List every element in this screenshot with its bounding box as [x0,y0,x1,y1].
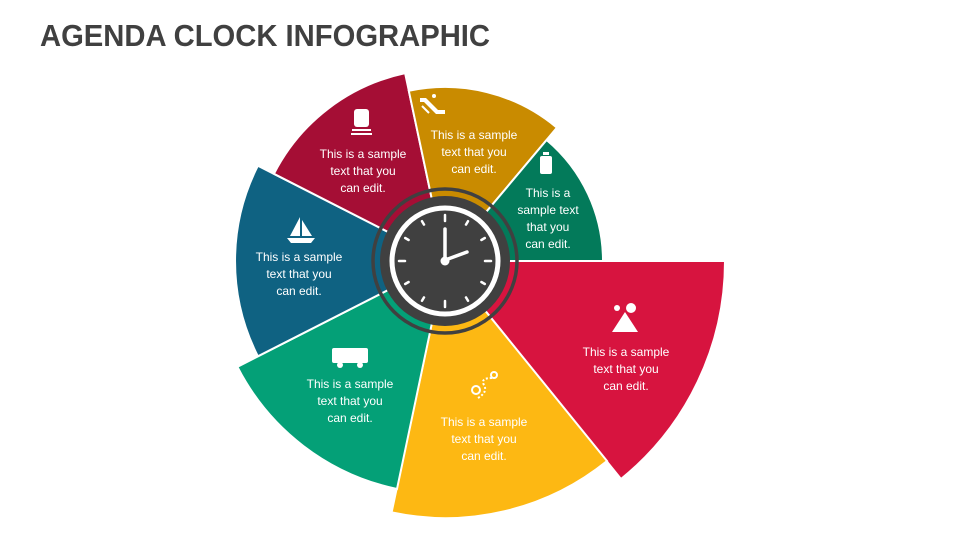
clock [373,189,517,333]
panel: green slice [237,261,445,489]
text: gold: text that you [441,145,507,159]
text: blue: This is a sample [256,250,343,264]
text: teal: can edit. [525,237,571,251]
title: AGENDA CLOCK INFOGRAPHIC [40,18,490,53]
icon: escalator [420,94,445,114]
text: blue: can edit. [276,284,322,298]
text: red: text that you [593,362,659,376]
panel: yellow slice [392,261,607,518]
text: yellow: text that you [451,432,517,446]
panel: red slice [445,261,725,479]
text: dark red: This is a sample [320,147,407,161]
text: green: can edit. [327,411,373,425]
panel: teal slice [445,140,603,261]
icon: sailboat [287,217,315,243]
panel: gold slice [409,87,557,261]
text: green: text that you [317,394,383,408]
icon: mountain balloon [612,303,638,332]
panel: blue slice [235,166,445,356]
text: red: can edit. [603,379,649,393]
text: teal: that you [527,220,569,234]
icon: route [472,372,497,398]
icon: luggage [540,152,552,174]
text: yellow: can edit. [461,449,507,463]
text: teal: sample text [517,203,579,217]
text: dark red: text that you [330,164,396,178]
text: gold: can edit. [451,162,497,176]
text: dark red: can edit. [340,181,386,195]
text: red: This is a sample [583,345,670,359]
panel: dark red slice [274,73,445,261]
icon: train [351,109,372,135]
text: blue: text that you [266,267,332,281]
text: green: This is a sample [307,377,394,391]
text: teal: This is a [526,186,571,200]
text: yellow: This is a sample [441,415,528,429]
text: gold: This is a sample [431,128,518,142]
icon: camper van [332,348,368,368]
